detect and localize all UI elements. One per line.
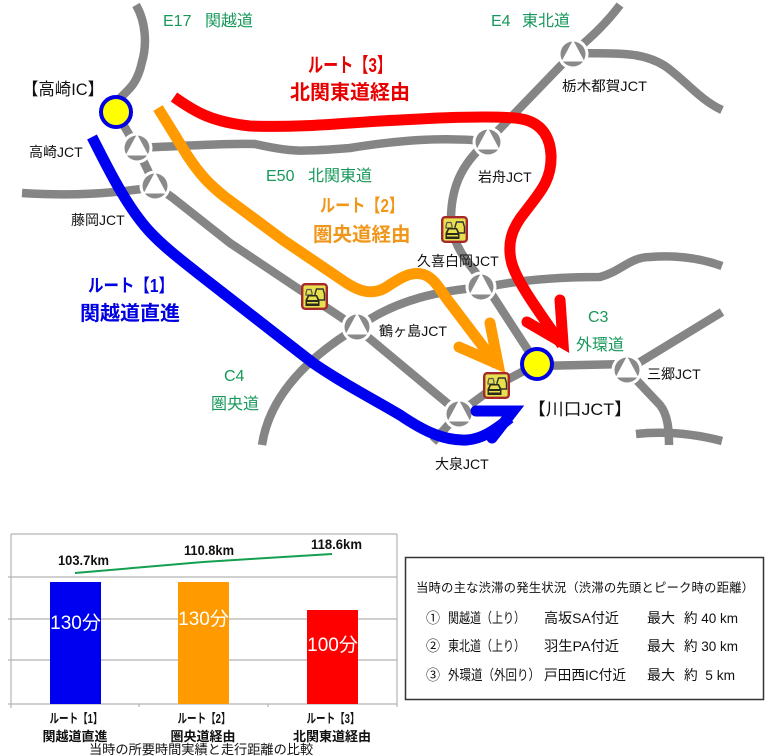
row 3: 最大 xyxy=(647,667,675,683)
icon: Takasaki JCT xyxy=(122,132,152,164)
bar: route 3: 100分 xyxy=(307,634,358,656)
axis label: route 3 xyxy=(293,711,371,744)
label: E4: 東北道 xyxy=(522,12,570,30)
route 3 red line xyxy=(174,97,562,345)
axis label: route 1: ルート【1】 xyxy=(50,711,102,726)
label: Oizumi JCT: 大泉JCT xyxy=(435,456,489,472)
panel heading: 当時の主な渋滞の発生状況（渋滞の先頭とピーク時の距離） xyxy=(416,580,754,595)
bar: route 2: 130分 xyxy=(178,608,229,630)
label: Takasaki IC: 【高崎IC】 xyxy=(22,80,104,99)
axis label: route 3: 北関東道経由 xyxy=(293,729,371,744)
line: distance xyxy=(75,554,332,573)
bar: route 1: 130分 xyxy=(50,612,101,634)
row 3: ③ xyxy=(426,667,440,683)
road labels xyxy=(163,12,624,413)
value: route 1 distance: 103.7km xyxy=(58,552,109,568)
bar: route 3 xyxy=(307,610,358,704)
axis label: route 2 xyxy=(170,711,236,744)
node: Takasaki IC xyxy=(101,97,131,127)
road: branch north-east of Misato xyxy=(627,312,722,370)
road: C4 Ken-O expressway xyxy=(262,256,722,445)
route 2 orange line xyxy=(158,108,497,365)
label: E17: 関越道 xyxy=(205,12,253,30)
label: C3: C3 xyxy=(588,309,609,326)
axis label: route 2: 圏央道経由 xyxy=(170,729,236,744)
road: branch south of Misato xyxy=(627,370,669,445)
axis label: route 3: ルート【3】 xyxy=(306,711,360,726)
heading: route 3: ルート【3】 xyxy=(308,55,392,77)
road: E4 Tohoku expressway xyxy=(451,5,620,364)
text: route 1 name: 関越道直進 xyxy=(80,302,180,325)
axis label: route 1 xyxy=(42,711,108,744)
label: Ken-O: 圏央道 xyxy=(211,395,259,413)
chart gridlines and axes xyxy=(8,534,397,708)
label: C4: C4 xyxy=(224,368,245,385)
bar: route 2 xyxy=(178,582,229,704)
row 1: 高坂SA付近 xyxy=(544,610,619,626)
label: Kuki-Shiraoka JCT: 久喜白岡JCT xyxy=(417,253,499,269)
heading: route 1: ルート【1】 xyxy=(88,276,174,296)
label: Tochigi-Tsuga JCT: 栃木都賀JCT xyxy=(562,78,647,94)
route 1 blue line xyxy=(92,137,510,440)
route titles xyxy=(80,55,411,325)
row 3: 約 5 km xyxy=(684,667,735,683)
value: route 3 distance: 118.6km xyxy=(311,536,362,552)
label: Fujioka JCT: 藤岡JCT xyxy=(71,212,125,228)
row 1: ① xyxy=(426,610,440,626)
road: E50 Kita-Kanto expressway east xyxy=(137,139,487,151)
row 1: 関越道（上り） xyxy=(448,610,525,626)
label: E17: E17 xyxy=(163,13,191,30)
row 1: 約 40 km xyxy=(684,610,738,626)
icon: Iwafune JCT xyxy=(472,126,504,158)
row 2 xyxy=(426,638,738,654)
label: E50: E50 xyxy=(266,168,294,185)
icon: Fujioka JCT xyxy=(140,170,170,202)
icon: Misato JCT xyxy=(612,354,642,386)
label: Misato JCT: 三郷JCT xyxy=(647,366,701,382)
arrow head: route 2 xyxy=(459,323,498,364)
label: E50: 北関東道 xyxy=(308,167,372,185)
row 2: 最大 xyxy=(647,638,675,654)
axis label: route 1: 関越道直進 xyxy=(42,729,108,744)
row 3: 外環道（外回り） xyxy=(448,667,540,683)
text: route 3 name: 北関東道経由 xyxy=(290,81,410,104)
label: Takasaki JCT: 高崎JCT xyxy=(29,144,83,160)
row 2: 羽生PA付近 xyxy=(544,638,619,654)
icon: Tochigi-Tsuga JCT xyxy=(558,38,588,70)
row 2: 約 30 km xyxy=(684,638,738,654)
value: route 2 distance: 110.8km xyxy=(184,542,234,558)
axis label: route 2: ルート【2】 xyxy=(178,711,230,726)
row 3: 戸田西IC付近 xyxy=(544,667,626,683)
row 2: ② xyxy=(426,638,440,654)
row 3 xyxy=(426,667,735,683)
label: Iwafune JCT: 岩舟JCT xyxy=(478,169,532,185)
map xyxy=(22,5,722,472)
place labels xyxy=(22,78,701,472)
road: south-east cross road xyxy=(636,433,722,441)
road: E50 Kita-Kanto expressway west xyxy=(22,187,155,194)
icon: Tsurugashima JCT xyxy=(342,312,372,342)
road: E17 and Kan-etsu expressway xyxy=(116,5,459,413)
chart: travel time and distance xyxy=(8,534,397,756)
text: route 2 name: 圏央道経由 xyxy=(313,224,411,246)
label: Tsurugashima JCT: 鶴ヶ島JCT xyxy=(379,323,447,339)
label: E4: E4 xyxy=(491,13,511,30)
row 1 xyxy=(426,610,738,626)
node: Kawaguchi JCT xyxy=(522,349,552,379)
row 1: 最大 xyxy=(647,610,675,626)
icon: traffic jam on Gaikan xyxy=(484,373,509,398)
bar: route 1 xyxy=(50,582,101,704)
icon: traffic jam on Kan-etsu xyxy=(302,284,327,309)
panel border xyxy=(406,558,764,700)
arrow head: route 3 xyxy=(527,300,563,343)
junction icons xyxy=(122,38,642,430)
label: Kawaguchi JCT: 【川口JCT】 xyxy=(528,400,632,419)
label: Gaikan: 外環道 xyxy=(576,336,624,354)
panel: congestion status xyxy=(406,558,764,700)
road: Oizumi to Kawaguchi xyxy=(433,364,537,442)
road: Tochigi-Tsuga branch xyxy=(573,53,722,110)
icon: Kuki-Shiraoka JCT xyxy=(466,272,496,302)
icon: traffic jam on Tohoku xyxy=(442,217,467,242)
road: C3 Gaikan expressway xyxy=(537,364,627,366)
heading: route 2: ルート【2】 xyxy=(320,196,404,216)
row 2: 東北道（上り） xyxy=(448,638,525,654)
icon: Oizumi JCT xyxy=(444,398,474,430)
arrow head: route 1 xyxy=(476,411,513,438)
